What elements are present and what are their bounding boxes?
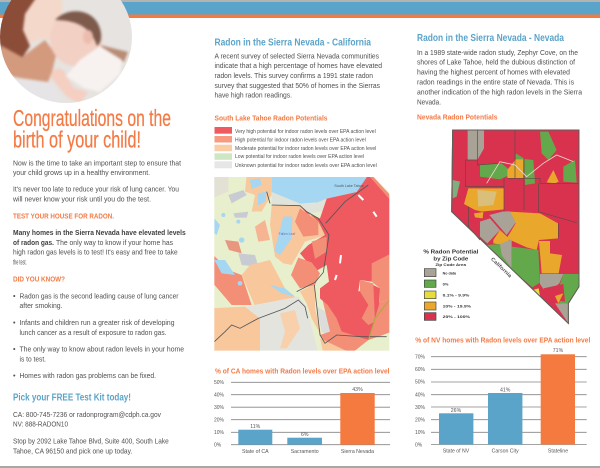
call to action heading: Pick your FREE Test Kit today! [13, 392, 131, 404]
middle column paragraph: indicate that a high percentage of homes have elevated [214, 61, 382, 70]
bar: Carson City: 41% [500, 388, 511, 394]
contact details: CA: 800-745-7236 or radonprogram@cdph.ca.gov [13, 410, 161, 419]
bullet list: • [13, 318, 16, 327]
header band [0, 0, 600, 18]
map legend: radon potential by zip code: 0.1% - 9.9% [443, 292, 470, 297]
chart title: % of CA homes with Radon levels over EPA action level [215, 366, 390, 375]
right column paragraph: another indication of the high radon levels in the Sierra [417, 87, 583, 96]
title: birth of your child! [13, 127, 141, 153]
bar: State of NV [439, 408, 473, 454]
intro text: will never know your risk until you do the test. [12, 194, 151, 204]
bar chart: NV homes [415, 335, 590, 454]
middle column paragraph: have high radon readings. [214, 91, 292, 100]
radon levels paragraph [13, 228, 186, 266]
subheading: South Lake Tahoe map: South Lake Tahoe Radon Potentials [214, 114, 328, 123]
map legend: South Lake Tahoe: Very high potential for indoor radon levels over EPA action level [235, 129, 376, 135]
bar: Sierra Nevada: 43% [352, 387, 363, 393]
map legend: radon potential by zip code: No data [443, 271, 457, 276]
y axis labels: 10% [415, 430, 426, 436]
bar: State of NV: State of NV [443, 448, 470, 454]
map legend: radon potential by zip code [423, 249, 479, 320]
map: South Lake Tahoe radon potentials: South Lake Tahoe [334, 184, 364, 188]
subheading: test your house: TEST YOUR HOUSE FOR RADON. [13, 212, 114, 220]
y axis labels: 50% [415, 380, 426, 386]
map legend: South Lake Tahoe: Unknown potential for indoor radon levels over EPA action level [235, 163, 377, 169]
bullet list [13, 292, 184, 380]
right column paragraph: radon readings in the entire state of Nevada. This is [417, 77, 574, 86]
radon levels paragraph: The only way to know if your home has [56, 238, 173, 247]
y axis labels: 10% [214, 430, 225, 436]
bar: State of CA: 11% [250, 424, 261, 430]
map legend: radon potential by zip code: % Radon Potential [423, 249, 479, 255]
bullet list: after smoking. [20, 301, 62, 310]
map legend: radon potential by zip code: 10% - 19.9% [443, 303, 472, 308]
map legend: South Lake Tahoe: Moderate potential for indoor radon levels over EPA action level [235, 146, 376, 152]
bar: Sacramento: 6% [301, 432, 309, 438]
contact details [13, 410, 169, 456]
bar: State of CA [238, 424, 272, 455]
y axis labels: 50% [214, 380, 225, 386]
map: South Lake Tahoe radon potentials: Fallen Leaf [279, 232, 295, 236]
y axis labels [214, 380, 225, 448]
title: Congratulations on the [13, 105, 171, 131]
intro text: Now is the time to take an important step to ensure that [13, 158, 181, 168]
bar chart: CA homes [214, 366, 390, 455]
contact details: Stop by 2092 Lake Tahoe Blvd, Suite 400, South Lake [13, 436, 169, 446]
y axis labels: 40% [415, 392, 426, 398]
bullet list: is to test. [20, 354, 46, 364]
bullet list: The only way to know about radon levels in your home [20, 344, 184, 354]
radon levels paragraph: the test. [13, 258, 27, 266]
map legend: radon potential by zip code: by Zip Code [433, 256, 468, 262]
left column: congratulations panel [12, 105, 186, 456]
y axis labels: 70% [415, 354, 426, 360]
map legend: South Lake Tahoe: High potential for indoor radon levels over EPA action level [235, 138, 366, 144]
y axis labels: 20% [214, 418, 225, 424]
map legend: radon potential by zip code: Zip Code Area [435, 262, 467, 267]
y axis labels: 60% [415, 367, 426, 373]
right column heading: Radon in the Sierra Nevada - Nevada [417, 32, 564, 44]
intro text [12, 158, 181, 204]
middle column paragraph: radon levels. This survey confirms a 1991 state radon [214, 71, 373, 80]
bar: Sierra Nevada: Sierra Nevada [341, 449, 374, 455]
middle column heading: Radon in the Sierra Nevada - California [214, 36, 371, 48]
bar: Stateline: Stateline [548, 448, 568, 454]
subheading: Nevada map: Nevada Radon Potentials [417, 112, 498, 121]
bullet list: Homes with radon gas problems can be fixed. [20, 371, 156, 380]
radon levels paragraph: Many homes in the Sierra Nevada have elevated levels [13, 228, 186, 237]
middle column paragraph: A recent survey of selected Sierra Nevada communities [214, 51, 379, 60]
bar: Sacramento: Sacramento [291, 449, 319, 455]
right column paragraph: having the highest percent of homes with elevated [417, 67, 570, 76]
map legend: radon potential by zip code: 0% [443, 281, 449, 286]
bullet list: lunch cancer as a result of exposure to radon gas. [20, 328, 166, 337]
y axis labels: 0% [415, 442, 423, 448]
map legend: South Lake Tahoe: Low potential for indoor radon levels over EPA action level [235, 154, 364, 160]
bar: Sacramento [287, 432, 322, 455]
contact details: NV: 888-RADON10 [13, 420, 68, 428]
y axis labels: 30% [415, 405, 426, 411]
intro text: your child grows up in a healthy environment. [13, 168, 150, 177]
intro text: It's never too late to reduce your risk of lung cancer. You [13, 184, 179, 194]
map legend: South Lake Tahoe [214, 127, 377, 169]
map legend: radon potential by zip code: 20% - 100% [443, 314, 471, 319]
y axis labels: 20% [415, 418, 426, 424]
middle column paragraph: survey that suggested that 50% of homes in the Sierras [214, 81, 380, 90]
bullet list: • [13, 292, 16, 300]
y axis labels: 40% [214, 392, 225, 398]
subheading: did you know: DID YOU KNOW? [13, 274, 65, 284]
bar: Stateline [541, 348, 575, 454]
right column paragraph: shores of Lake Tahoe, held the dubious distinction of [417, 58, 576, 67]
radon levels paragraph: of radon gas. [13, 238, 54, 247]
bar: Stateline: 71% [553, 348, 564, 354]
middle column paragraph [214, 51, 382, 100]
bar: Carson City [488, 388, 522, 454]
bullet list: • [13, 344, 16, 354]
radon levels paragraph: high radon gas levels is to test! It's easy and free to take [13, 248, 178, 256]
footer rule [0, 466, 600, 468]
map label: California: California [489, 256, 513, 279]
bullet list: • [13, 371, 16, 380]
map: Nevada radon potentials [423, 130, 579, 323]
right column paragraph: Nevada. [417, 97, 441, 106]
bar: State of CA: State of CA [242, 449, 269, 455]
bullet list: Radon gas is the second leading cause of lung cancer [20, 292, 179, 300]
y axis labels: 30% [214, 405, 225, 411]
y axis labels [415, 354, 426, 448]
right column paragraph: In a 1989 state-wide radon study, Zephyr Cove, on the [417, 48, 578, 57]
bar: Sierra Nevada [340, 387, 375, 455]
bar: State of NV: 26% [451, 408, 462, 414]
bar: Carson City: Carson City [492, 448, 519, 454]
map: South Lake Tahoe radon potentials [212, 175, 392, 353]
contact details: Tahoe, CA 96150 and pick one up today. [13, 446, 132, 456]
y axis labels: 0% [214, 442, 222, 448]
right column paragraph [417, 48, 583, 106]
bullet list: Infants and children run a greater risk of developing [20, 318, 174, 327]
photo: mother and newborn [0, 0, 132, 103]
